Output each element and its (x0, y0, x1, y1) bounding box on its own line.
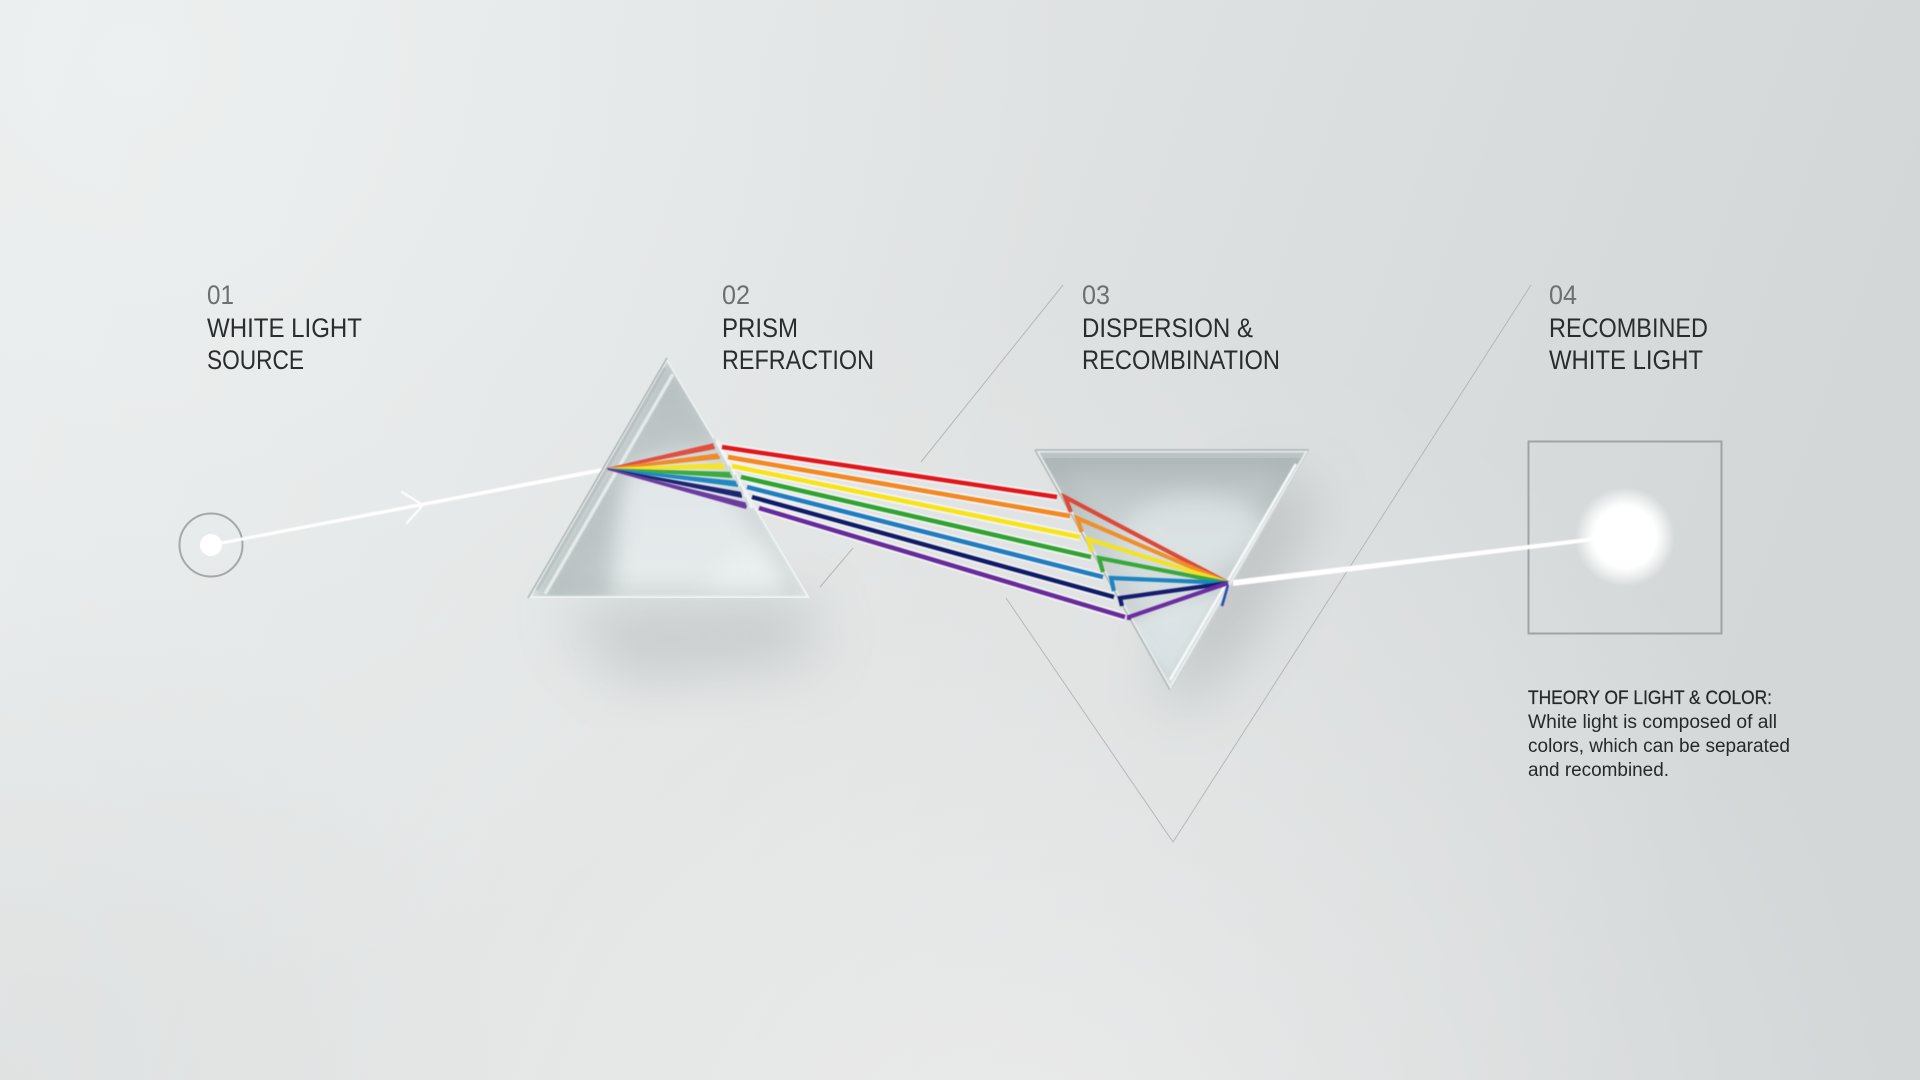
rays inside prism 1 (607, 438, 748, 509)
rays converging inside prism 2 (1065, 497, 1228, 620)
label: step 01 (207, 280, 362, 375)
label: step 03: 03 (1082, 280, 1110, 310)
theory caption: and recombined. (1528, 760, 1669, 781)
prism shadows (560, 480, 1320, 705)
label: step 04 (1549, 280, 1708, 375)
label: step 01: SOURCE (207, 345, 304, 375)
white light source icon (180, 514, 242, 576)
recombination box (1528, 442, 1722, 634)
construction lines (820, 285, 1531, 842)
label: step 02: 02 (722, 280, 750, 310)
label: step 03 (1082, 280, 1280, 375)
incoming white beam with arrow (211, 467, 607, 546)
label: step 02: REFRACTION (722, 345, 874, 375)
recombined white light glow (1575, 487, 1675, 587)
label: step 02: PRISM (722, 313, 798, 343)
label: step 04: WHITE LIGHT (1549, 345, 1703, 375)
label: step 04: 04 (1549, 280, 1577, 310)
theory caption (1528, 688, 1790, 781)
theory caption: White light is composed of all (1528, 712, 1777, 733)
label: step 02 (722, 280, 874, 375)
prism 1 (528, 358, 810, 605)
label: step 04: RECOMBINED (1549, 313, 1708, 343)
prism 2 (1035, 450, 1309, 690)
label: step 03: DISPERSION & (1082, 313, 1253, 343)
label: step 03: RECOMBINATION (1082, 345, 1280, 375)
dispersed rainbow beam between prisms (722, 447, 1125, 617)
recombined white beam (1233, 537, 1595, 586)
label: step 01: WHITE LIGHT (207, 313, 362, 343)
theory caption: THEORY OF LIGHT & COLOR: (1528, 688, 1772, 709)
theory caption: colors, which can be separated (1528, 736, 1790, 757)
label: step 01: 01 (207, 280, 234, 310)
